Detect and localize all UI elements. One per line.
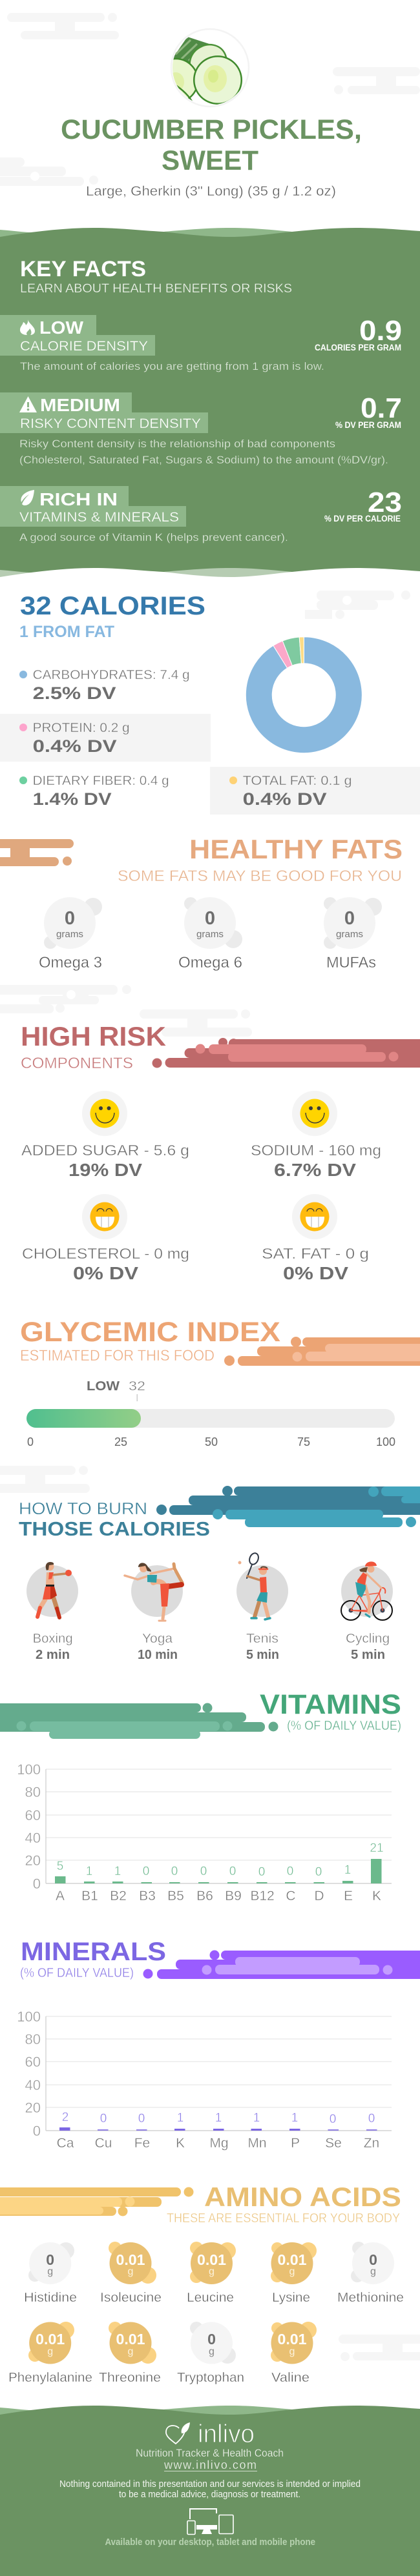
icon: devices — [187, 2509, 233, 2534]
stat: isoleucine: Isoleucine — [100, 2291, 162, 2305]
bar chart: vitamins: B6 — [196, 1889, 213, 1903]
fact: rich in vitamins and minerals — [0, 486, 402, 543]
legend: protein — [0, 714, 211, 762]
stat: valine — [271, 2322, 317, 2385]
chart: glycemic gauge: 100 — [376, 1435, 395, 1448]
legend: total fat: TOTAL FAT: 0.1 g — [243, 774, 352, 788]
legend: carbohydrates — [19, 668, 190, 703]
icon: flame — [20, 319, 35, 335]
activity: tennis — [236, 1552, 288, 1662]
risk: cholesterol: 0% DV — [73, 1263, 138, 1283]
stat: MUFAs: grams — [336, 929, 363, 940]
panel: footer — [0, 2406, 420, 2576]
panel: calories — [0, 592, 420, 815]
heading: minerals: (% OF DAILY VALUE) — [20, 1966, 134, 1980]
heading: key facts: KEY FACTS — [20, 257, 146, 281]
stat: methionine: 0 — [369, 2251, 377, 2268]
bar chart: vitamins: B3 — [139, 1889, 156, 1903]
stat: valine: 0.01 — [278, 2331, 307, 2348]
bar chart: minerals: K — [176, 2136, 185, 2151]
activity: tennis: Tenis — [246, 1632, 278, 1646]
bar chart: minerals: 0 — [138, 2112, 145, 2125]
stat: methionine: Methionine — [337, 2291, 404, 2305]
stat: lysine: Lysine — [272, 2291, 310, 2305]
stat: isoleucine: g — [128, 2266, 133, 2277]
heading: amino acids: AMINO ACIDS — [204, 2182, 401, 2212]
decoration: vitamins bars — [0, 1703, 278, 1739]
risk: saturated fat: 0% DV — [283, 1263, 348, 1283]
decoration: healthy fats bars — [0, 839, 74, 866]
bar chart: vitamins: B5 — [167, 1889, 184, 1903]
fact: calorie density — [0, 315, 402, 372]
stat: lysine — [271, 2242, 317, 2305]
stat: methionine — [337, 2242, 404, 2305]
risk: added sugar: ADDED SUGAR - 5.6 g — [21, 1142, 189, 1159]
fact: risky content density — [0, 392, 402, 466]
bar chart: vitamins: 0 — [200, 1865, 207, 1878]
heading: how to burn: HOW TO BURN — [19, 1499, 147, 1518]
risk: saturated fat: SAT. FAT - 0 g — [262, 1245, 369, 1262]
bar chart: vitamins: D — [314, 1889, 324, 1903]
bar chart: vitamins: 0 — [143, 1865, 149, 1878]
icon: boxer — [26, 1562, 78, 1618]
bar chart: vitamins: 60 — [25, 1807, 41, 1823]
activity: boxing: Boxing — [33, 1632, 73, 1646]
legend: dietary fiber: 1.4% DV — [33, 789, 112, 809]
bar chart: minerals: 60 — [25, 2054, 41, 2070]
heading: high risk: HIGH RISK — [21, 1021, 166, 1051]
bar chart: minerals — [17, 2009, 392, 2151]
bar chart: vitamins: 5 — [57, 1860, 63, 1873]
activity: tennis: 5 min — [246, 1648, 279, 1662]
stat: MUFAs: 0 — [344, 908, 355, 929]
heading: minerals — [20, 1938, 166, 1980]
heading: 32 calories: 32 CALORIES — [20, 592, 205, 620]
risk: added sugar: 19% DV — [68, 1160, 142, 1180]
stat: phenylalanine: g — [47, 2346, 53, 2357]
background cloud: burn — [0, 1466, 90, 1493]
fact: risky content density: (Cholesterol, Saturated Fat, Sugars & Sodium) to the amount (%DV/gr). — [19, 454, 388, 466]
stat: lysine: 0.01 — [278, 2251, 307, 2268]
activity: boxing — [26, 1562, 78, 1662]
stat: leucine — [187, 2242, 236, 2305]
bar chart: vitamins: A — [56, 1889, 65, 1903]
bar chart: minerals: 2 — [62, 2111, 68, 2124]
stat: leucine: Leucine — [187, 2291, 234, 2305]
fact: calorie density: The amount of calories you are getting from 1 gram is low. — [20, 360, 324, 372]
stat: MUFAs — [324, 897, 382, 971]
title — [61, 114, 362, 176]
stat: threonine: Threonine — [99, 2371, 161, 2385]
legend: dietary fiber — [19, 774, 169, 809]
chart: glycemic gauge — [26, 1379, 395, 1448]
bar chart: vitamins: 100 — [17, 1761, 41, 1778]
legend: protein: 0.4% DV — [33, 736, 117, 756]
icon: smile — [292, 1091, 337, 1136]
heading: 32 calories: 1 FROM FAT — [19, 623, 114, 641]
stat: methionine: g — [370, 2266, 376, 2277]
heading: amino acids — [167, 2182, 401, 2226]
legend: carbohydrates: 2.5% DV — [33, 684, 116, 703]
bar chart: minerals: 20 — [25, 2100, 41, 2116]
legend: total fat: 0.4% DV — [243, 789, 327, 809]
bar chart: minerals: Mg — [209, 2136, 229, 2151]
icon: leaf — [21, 490, 34, 505]
fact: rich in vitamins and minerals: 23 — [368, 487, 402, 518]
donut chart — [246, 637, 362, 753]
bar chart: minerals: 1 — [291, 2111, 298, 2125]
stat: threonine: g — [128, 2346, 133, 2357]
stat: phenylalanine: Phenylalanine — [8, 2371, 92, 2385]
fact: rich in vitamins and minerals: % DV PER CALORIE — [324, 514, 401, 523]
heading: key facts: LEARN ABOUT HEALTH BENEFITS OR RISKS — [20, 281, 292, 296]
heading: how to burn: THOSE CALORIES — [19, 1517, 210, 1540]
chart: glycemic gauge: LOW — [87, 1379, 120, 1394]
heading: healthy fats: SOME FATS MAY BE GOOD FOR YOU — [118, 867, 402, 885]
bar chart: vitamins: B12 — [250, 1889, 275, 1903]
disclaimer: to be a medical advice, diagnosis or treatment. — [119, 2490, 300, 2500]
fact: risky content density: % DV PER GRAM — [335, 420, 401, 430]
stat: tryptophan: g — [209, 2346, 215, 2357]
icon: tennis player — [236, 1552, 288, 1619]
stat: phenylalanine: 0.01 — [36, 2331, 65, 2348]
risk: sodium: SODIUM - 160 mg — [251, 1142, 381, 1159]
activity: boxing: 2 min — [36, 1648, 70, 1662]
heading: glycemic index — [20, 1317, 280, 1364]
fact: risky content density: MEDIUM — [40, 395, 120, 415]
stat: threonine: 0.01 — [116, 2331, 145, 2348]
heading: vitamins: VITAMINS — [260, 1689, 401, 1720]
fact: calorie density: LOW — [39, 318, 84, 338]
icon: yoga pose — [125, 1563, 183, 1621]
bar chart: minerals: P — [291, 2136, 300, 2151]
stat: omega 3 — [39, 897, 102, 971]
activity: cycling: Cycling — [346, 1632, 390, 1646]
heading: vitamins — [260, 1689, 401, 1733]
bar chart: vitamins: B1 — [81, 1889, 98, 1903]
stat: omega 6: Omega 6 — [178, 954, 242, 971]
icon: warning triangle — [19, 396, 37, 412]
bar chart: vitamins: 1 — [344, 1863, 351, 1877]
bar chart: minerals: 0 — [330, 2113, 336, 2126]
background clouds: high risk — [0, 985, 252, 1037]
decoration: high risk bars — [152, 1038, 420, 1068]
panel: footer: Nutrition Tracker & Health Coach — [136, 2447, 284, 2459]
bar chart: vitamins: C — [286, 1889, 296, 1903]
stat: omega 6 — [178, 897, 242, 971]
bar chart: vitamins: B2 — [110, 1889, 127, 1903]
logo: inlivo — [166, 2420, 255, 2448]
bar chart: vitamins: 1 — [86, 1865, 92, 1878]
heading: healthy fats: HEALTHY FATS — [189, 834, 403, 864]
stat: histidine: 0 — [46, 2251, 54, 2268]
risk: cholesterol: CHOLESTEROL - 0 mg — [22, 1245, 189, 1262]
icon: grin — [82, 1194, 127, 1239]
stat: omega 6: grams — [196, 929, 224, 940]
bar chart: minerals: Fe — [134, 2136, 150, 2151]
panel: key facts — [0, 228, 420, 581]
bar chart: vitamins: B9 — [225, 1889, 242, 1903]
bar chart: vitamins: 40 — [25, 1830, 41, 1846]
stat: leucine: 0.01 — [197, 2251, 226, 2268]
risk: added sugar — [21, 1091, 189, 1180]
bar chart: minerals: 1 — [215, 2111, 222, 2125]
icon: smile — [82, 1091, 127, 1136]
stat: histidine — [24, 2242, 77, 2305]
bar chart: vitamins: K — [372, 1889, 381, 1903]
serving size: Large, Gherkin (3" Long) (35 g / 1.2 oz) — [86, 184, 336, 199]
bar chart: minerals: 0 — [33, 2123, 41, 2139]
bar chart: vitamins: 0 — [171, 1865, 178, 1878]
chart: glycemic gauge: 25 — [114, 1435, 127, 1448]
stat: threonine — [99, 2322, 161, 2385]
bar chart: vitamins: 0 — [287, 1865, 293, 1878]
heading: glycemic index: GLYCEMIC INDEX — [20, 1317, 280, 1348]
bar chart: minerals: Mn — [247, 2136, 267, 2151]
stat: valine: g — [289, 2346, 295, 2357]
stat: isoleucine — [100, 2242, 162, 2305]
chart: glycemic gauge: 50 — [205, 1435, 218, 1448]
icon: grin — [292, 1194, 337, 1239]
risk: sodium — [251, 1091, 381, 1180]
heading: how to burn — [19, 1499, 210, 1540]
decoration: glycemic index bars — [224, 1337, 420, 1366]
heading: glycemic index: ESTIMATED FOR THIS FOOD — [20, 1347, 215, 1364]
bar chart: minerals: Zn — [364, 2136, 379, 2151]
stat: valine: Valine — [271, 2371, 310, 2385]
title: SWEET — [162, 145, 258, 176]
heading: minerals: MINERALS — [21, 1938, 166, 1966]
legend: carbohydrates: CARBOHYDRATES: 7.4 g — [33, 668, 190, 682]
logo: inlivo: inlivo — [198, 2420, 255, 2448]
bar chart: minerals: 0 — [100, 2112, 107, 2125]
panel: footer: Available on your desktop, tablet and mobile phone — [105, 2537, 315, 2548]
fact: rich in vitamins and minerals: A good source of Vitamin K (helps prevent cancer). — [19, 531, 288, 543]
stat: MUFAs: MUFAs — [326, 954, 376, 971]
stat: omega 3: 0 — [65, 908, 75, 929]
bar chart: vitamins: 0 — [33, 1876, 41, 1892]
fact: risky content density: RISKY CONTENT DENSITY — [20, 416, 201, 431]
stat: isoleucine: 0.01 — [116, 2251, 145, 2268]
bar chart: minerals: Cu — [95, 2136, 112, 2151]
decoration: burn bars — [156, 1486, 420, 1527]
background cloud: amino — [339, 2335, 420, 2361]
stat: histidine: g — [47, 2266, 53, 2277]
background clouds: header — [0, 13, 420, 186]
bar chart: vitamins: 21 — [370, 1841, 384, 1855]
risk: cholesterol — [22, 1194, 189, 1283]
legend: protein: PROTEIN: 0.2 g — [33, 721, 130, 735]
activity: cycling — [341, 1561, 393, 1662]
bar chart: minerals: Ca — [57, 2136, 74, 2151]
bar chart: vitamins: 0 — [258, 1865, 265, 1879]
fact: rich in vitamins and minerals: VITAMINS & MINERALS — [19, 510, 179, 525]
chart: glycemic gauge: 32 — [129, 1379, 145, 1394]
activity: yoga — [125, 1563, 183, 1662]
chart: glycemic gauge: 0 — [27, 1435, 34, 1448]
icon: cyclist — [341, 1561, 393, 1620]
activity: yoga: 10 min — [138, 1648, 178, 1662]
bar chart: minerals: 0 — [368, 2112, 375, 2125]
fact: calorie density: CALORIES PER GRAM — [315, 343, 401, 352]
decoration: amino acids bars — [0, 2187, 194, 2216]
bar chart: minerals: 100 — [17, 2009, 41, 2025]
heading: amino acids: THESE ARE ESSENTIAL FOR YOUR BODY — [167, 2211, 400, 2226]
heading: high risk — [21, 1021, 166, 1072]
bar chart: vitamins — [17, 1761, 392, 1903]
stat: omega 3: Omega 3 — [39, 954, 102, 971]
heading: healthy fats — [118, 834, 403, 885]
decoration: minerals bars — [143, 1951, 420, 1979]
fact: calorie density: CALORIE DENSITY — [20, 339, 148, 354]
activity: yoga: Yoga — [142, 1632, 173, 1646]
fact: risky content density: 0.7 — [361, 392, 402, 424]
fact: rich in vitamins and minerals: RICH IN — [39, 489, 118, 509]
bar chart: minerals: Se — [325, 2136, 342, 2151]
disclaimer — [59, 2479, 361, 2500]
heading: key facts — [20, 257, 292, 296]
heading: 32 calories — [19, 592, 205, 641]
bar chart: minerals: 80 — [25, 2031, 41, 2047]
stat: omega 6: 0 — [205, 908, 215, 929]
stat: histidine: Histidine — [24, 2291, 77, 2305]
stat: omega 3: grams — [56, 929, 83, 940]
risk: sodium: 6.7% DV — [274, 1160, 356, 1180]
bar chart: vitamins: 0 — [229, 1865, 236, 1878]
fact: calorie density: 0.9 — [359, 315, 402, 347]
stat: tryptophan: 0 — [207, 2331, 216, 2348]
legend: dietary fiber: DIETARY FIBER: 0.4 g — [33, 774, 169, 788]
chart: glycemic gauge: 75 — [297, 1435, 310, 1448]
bar chart: vitamins: 20 — [25, 1852, 41, 1869]
bar chart: vitamins: 80 — [25, 1784, 41, 1800]
stat: tryptophan: Tryptophan — [177, 2371, 244, 2385]
bar chart: minerals: 1 — [177, 2111, 184, 2125]
stat: phenylalanine — [8, 2322, 92, 2385]
heading: vitamins: (% OF DAILY VALUE) — [287, 1719, 401, 1733]
risk: saturated fat — [262, 1194, 369, 1283]
background cloud: calories — [305, 591, 410, 619]
fact: risky content density: Risky Content density is the relationship of bad components — [19, 438, 335, 450]
title: CUCUMBER PICKLES, — [61, 114, 362, 145]
icon: cucumber photo — [171, 28, 249, 107]
link: website: www.inlivo.com — [163, 2459, 257, 2471]
stat: lysine: g — [289, 2266, 295, 2277]
activity: cycling: 5 min — [351, 1648, 385, 1662]
heading: high risk: COMPONENTS — [21, 1055, 133, 1072]
stat: leucine: g — [209, 2266, 215, 2277]
bar chart: minerals: 40 — [25, 2077, 41, 2093]
disclaimer: Nothing contained in this presentation and our services is intended or implied — [59, 2479, 361, 2490]
legend: total fat — [210, 767, 420, 815]
bar chart: vitamins: 0 — [315, 1865, 322, 1879]
bar chart: vitamins: E — [344, 1889, 353, 1903]
stat: tryptophan — [177, 2322, 244, 2385]
bar chart: vitamins: 1 — [114, 1865, 121, 1878]
bar chart: minerals: 1 — [253, 2111, 260, 2125]
